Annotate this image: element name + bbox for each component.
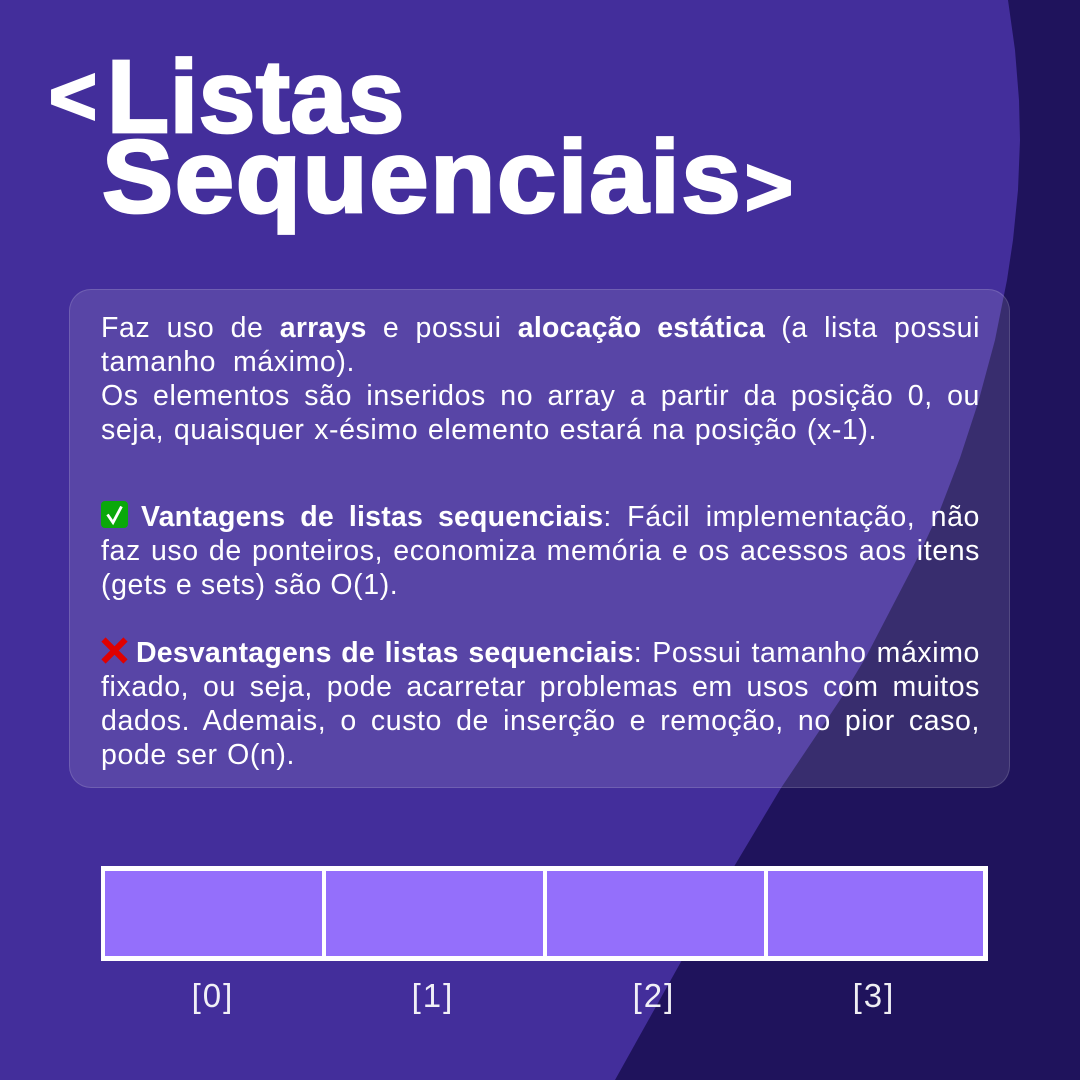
icon: green check: [101, 501, 128, 528]
text block: introduction: tamanho máximo).: [101, 346, 355, 378]
title opening bracket: <: [49, 51, 97, 142]
text block: advantages: (gets e sets) são O(1).: [101, 569, 398, 601]
icon: red cross: [101, 637, 128, 664]
text block: advantages: faz uso de ponteiros, economiza memória e os acessos aos itens: [101, 535, 980, 567]
text block: introduction: seja, quaisquer x-ésimo elemento estará na posição (x-1).: [101, 414, 877, 446]
text block: introduction: [101, 312, 980, 446]
title line 2: Sequenciais: [102, 119, 742, 234]
array index labels: [3]: [853, 977, 895, 1014]
array index labels: [0]: [192, 977, 234, 1014]
panel: description card: [69, 289, 1010, 788]
title line 1: Listas: [107, 39, 405, 154]
array index labels: [192, 977, 895, 1014]
array diagram: [101, 866, 988, 961]
text block: introduction: Os elementos são inseridos no array a partir da posição 0, ou: [101, 380, 980, 412]
text block: advantages: [101, 501, 980, 601]
array index labels: [2]: [633, 977, 675, 1014]
text block: disadvantages: dados. Ademais, o custo de inserção e remoção, no pior caso,: [101, 705, 980, 737]
title: [49, 39, 793, 235]
text block: disadvantages: Desvantagens de listas sequenciais: Possui tamanho máximo: [136, 637, 980, 669]
array index labels: [1]: [412, 977, 454, 1014]
text block: introduction: Faz uso de arrays e possui alocação estática (a lista possui: [101, 312, 980, 344]
text block: disadvantages: pode ser O(n).: [101, 739, 295, 771]
text block: disadvantages: fixado, ou seja, pode acarretar problemas em usos com muitos: [101, 671, 980, 703]
text block: disadvantages: [101, 637, 980, 771]
text block: advantages: Vantagens de listas sequenciais: Fácil implementação, não: [141, 501, 980, 533]
title closing bracket: >: [745, 142, 793, 233]
